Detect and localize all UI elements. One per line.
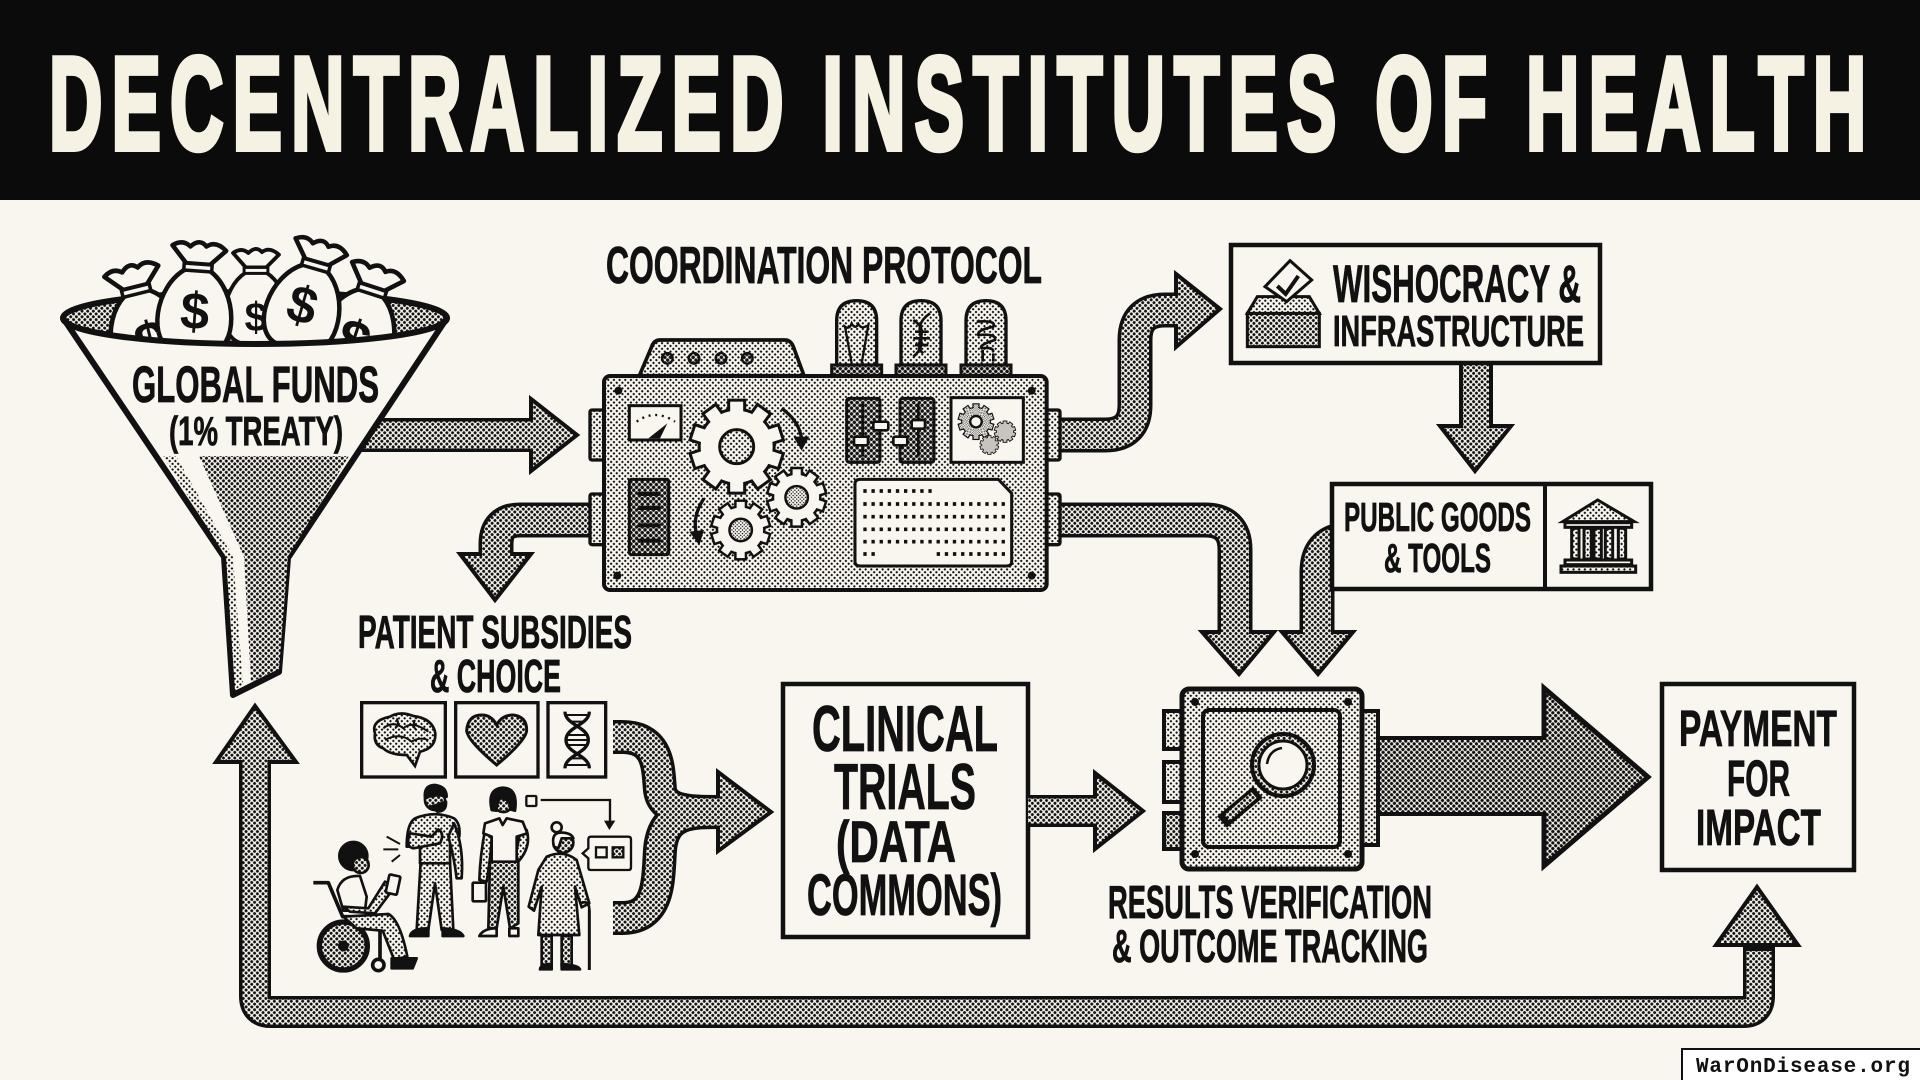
arrow: clinical trials to verification <box>1028 773 1143 849</box>
arrow: public goods to results verification <box>1282 540 1353 674</box>
medium gear <box>769 469 825 525</box>
icon: brain <box>362 703 445 777</box>
heading: patient subsidies and choice: & CHOICE <box>430 650 561 702</box>
panel: payment for impact: IMPACT <box>1696 799 1821 856</box>
module housing <box>1182 689 1362 869</box>
machine top housing <box>639 340 804 376</box>
panel: results verification module <box>1164 689 1378 869</box>
arrow: protocol to patient subsidies <box>460 520 592 600</box>
side connectors <box>590 410 1060 545</box>
side connectors <box>1164 711 1378 849</box>
corner bolts <box>613 387 1036 580</box>
funnel label: GLOBAL FUNDS <box>132 356 379 413</box>
icon: money bags: $ <box>328 306 378 376</box>
icon: money bags <box>93 231 416 385</box>
panel: clinical trials data commons: TRIALS <box>834 750 976 823</box>
label: results verification and outcome tracking: RESULTS VERIFICATION <box>1108 876 1432 928</box>
funnel label: (1% TREATY) <box>169 408 343 454</box>
arrow: protocol to results verification <box>1058 520 1274 674</box>
panel: payment for impact: PAYMENT <box>1679 700 1837 757</box>
figure: elderly woman with cane <box>529 822 589 970</box>
vacuum tube 1 <box>832 301 882 376</box>
gears display <box>951 398 1023 462</box>
analog meter <box>629 406 681 440</box>
funnel shading <box>163 456 349 690</box>
panel: payment for impact <box>1662 684 1854 870</box>
panel: coordination machine <box>590 301 1060 590</box>
panel: clinical trials data commons: CLINICAL <box>812 692 998 765</box>
icon: heart <box>456 703 538 777</box>
panel: public goods and tools: PUBLIC GOODS <box>1344 494 1531 540</box>
vacuum tube 3 with coil <box>961 301 1011 376</box>
icon: money bags: $ <box>280 274 324 338</box>
figure: standing man <box>407 785 463 936</box>
watermark: WarOnDisease.org <box>1696 1056 1910 1079</box>
funnel rim <box>63 292 447 344</box>
panel: payment for impact: FOR <box>1727 750 1790 807</box>
arrow: wishocracy to public goods <box>1440 362 1511 471</box>
panel: public goods and tools: & TOOLS <box>1384 535 1491 581</box>
title banner: DECENTRALIZED INSTITUTES OF HEALTH <box>49 29 1866 177</box>
panel: clinical trials data commons <box>783 684 1028 937</box>
icon: money bags: $ <box>128 307 174 377</box>
panel: clinical trials data commons: (DATA <box>836 810 956 875</box>
panel: clinical trials data commons: COMMONS) <box>807 863 1002 928</box>
icon: money bags: $ <box>245 294 268 340</box>
large gear <box>692 402 781 492</box>
machine body <box>604 376 1047 590</box>
thought connector and choice bubble <box>526 796 631 870</box>
arrow: verification to payment <box>1374 688 1648 866</box>
panel: patient choices and people <box>313 703 631 971</box>
heading: coordination protocol: COORDINATION PROTOCOL <box>606 237 1042 295</box>
rotation arrows <box>689 408 809 545</box>
arrow: protocol to wishocracy <box>1058 274 1220 435</box>
icon: ballot box <box>1247 261 1319 347</box>
panel: wishocracy and infrastructure: WISHOCRACY & <box>1333 255 1581 314</box>
panel: wishocracy and infrastructure <box>1231 245 1600 363</box>
icon: DNA <box>548 703 606 777</box>
bolts <box>1191 698 1352 858</box>
panel: global funds funnel <box>63 231 447 695</box>
arrow: patient branches merging into clinical trials <box>613 737 771 918</box>
figure: standing woman <box>473 788 528 936</box>
icon: magnifying glass <box>1222 734 1314 822</box>
vacuum tube 2 with DNA <box>896 301 946 376</box>
icon: temple <box>1561 500 1636 572</box>
panel: public goods and tools <box>1332 484 1651 589</box>
heading: patient subsidies and choice <box>358 606 632 702</box>
panel: wishocracy and infrastructure: INFRASTRUCTURE <box>1333 307 1584 356</box>
funnel label <box>132 356 379 454</box>
label: results verification and outcome tracking <box>1108 876 1432 972</box>
watermark <box>1682 1049 1920 1080</box>
heading: patient subsidies and choice: PATIENT SUBSIDIES <box>358 606 632 658</box>
arrow: feedback loop from payment to funnel <box>216 706 1798 1012</box>
funnel body <box>63 318 447 695</box>
peg board <box>855 479 1012 566</box>
icon: money bags: $ <box>178 282 211 342</box>
inner plate <box>1203 710 1340 847</box>
label: results verification and outcome tracking: & OUTCOME TRACKING <box>1112 920 1428 972</box>
slider 1 <box>847 398 888 462</box>
indicator strip <box>629 479 669 555</box>
small gear <box>713 502 769 558</box>
figure: person in wheelchair <box>313 837 417 971</box>
slider 2 <box>893 398 934 462</box>
arrow: funnel to coordination protocol <box>358 399 577 471</box>
